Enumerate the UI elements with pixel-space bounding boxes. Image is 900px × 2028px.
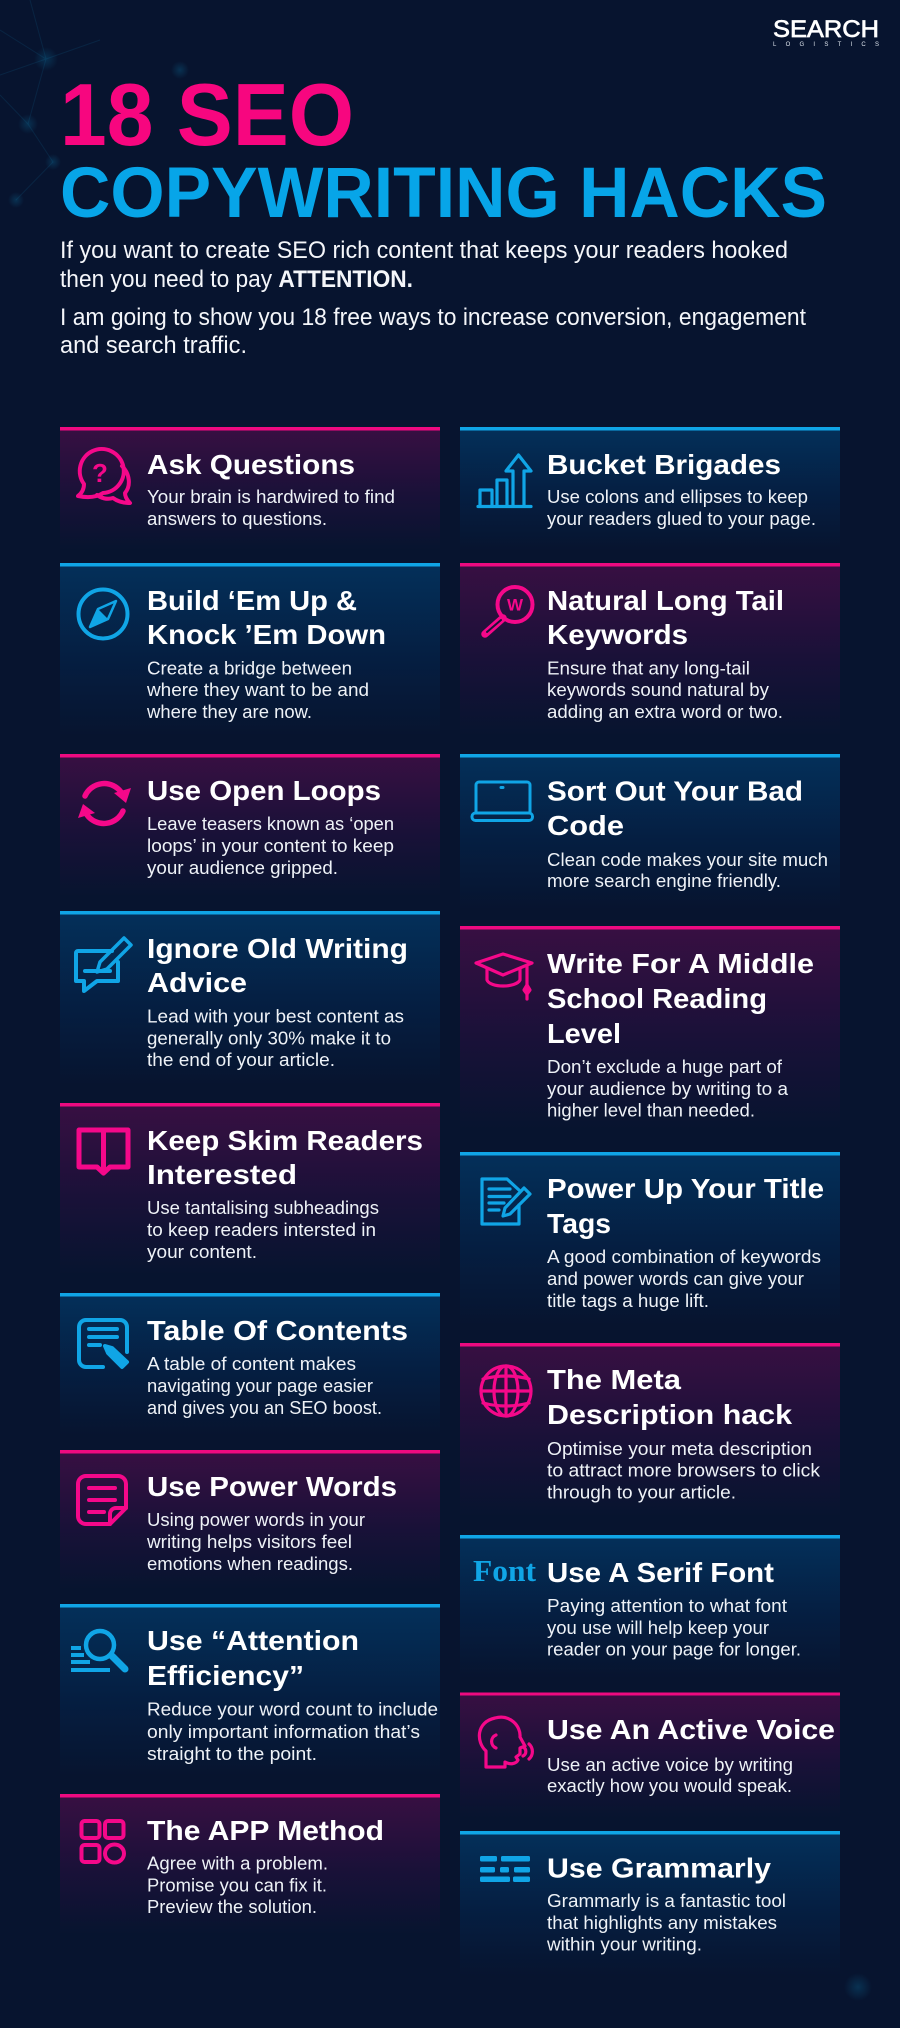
description: within your writing.	[546, 1934, 702, 1954]
panel: use an active voice	[460, 1692, 840, 1832]
description: writing helps visitors feel	[146, 1531, 352, 1552]
logo: SEARCH	[773, 16, 879, 43]
intro text: If you want to create SEO rich content that keeps your readers hooked	[60, 237, 788, 264]
intro text: and search traffic.	[60, 332, 247, 359]
description: Ensure that any long-tail	[547, 658, 750, 678]
panel: power up your title tags	[460, 1152, 840, 1344]
icon: document with pen	[482, 1179, 530, 1224]
panel: use power words	[60, 1450, 440, 1605]
description: the end of your article.	[147, 1049, 335, 1070]
description	[546, 1890, 786, 1954]
icon: text bars	[480, 1856, 530, 1882]
description	[147, 1197, 379, 1262]
description: Create a bridge between	[147, 658, 352, 678]
description: and power words can give your	[547, 1268, 804, 1289]
heading: Bucket Brigades	[547, 449, 781, 480]
description	[547, 1595, 801, 1660]
icon: app grid	[82, 1821, 124, 1862]
icon: laptop	[472, 782, 532, 820]
description: your readers glued to your page.	[547, 508, 816, 529]
description: to attract more browsers to click	[547, 1460, 821, 1480]
icon: growth chart	[478, 455, 531, 506]
panel: natural long tail keywords	[460, 563, 840, 755]
heading: Efficiency”	[147, 1660, 304, 1691]
heading: Description hack	[547, 1399, 792, 1430]
description: exactly how you would speak.	[547, 1775, 792, 1796]
heading: Tags	[547, 1208, 611, 1239]
description	[547, 1246, 821, 1311]
icon: graduation cap	[476, 954, 532, 999]
description: title tags a huge lift.	[547, 1290, 709, 1311]
heading	[147, 1125, 423, 1190]
title: 18 SEO	[60, 65, 354, 164]
panel: meta description hack	[460, 1343, 840, 1536]
heading: Write For A Middle	[547, 948, 814, 979]
heading: Use Grammarly	[547, 1852, 771, 1884]
description: Reduce your word count to include	[147, 1698, 438, 1720]
title	[60, 65, 827, 233]
description	[547, 658, 783, 722]
description: Paying attention to what font	[547, 1595, 787, 1616]
icon: loop arrows	[78, 784, 131, 823]
title: COPYWRITING HACKS	[60, 154, 827, 233]
icon: magnifier with W	[485, 587, 532, 634]
description: your audience gripped.	[147, 857, 338, 878]
heading: Code	[547, 810, 624, 841]
description	[146, 658, 369, 722]
heading	[147, 933, 408, 998]
description: A table of content makes	[147, 1353, 356, 1374]
description: where they are now.	[146, 701, 312, 722]
intro text	[60, 237, 806, 359]
description: Use an active voice by writing	[547, 1754, 793, 1775]
heading: Use An Active Voice	[547, 1714, 835, 1745]
heading: Table Of Contents	[147, 1315, 408, 1346]
description: Promise you can fix it.	[147, 1874, 327, 1896]
icon: document with pencil	[79, 1320, 127, 1367]
description: where they want to be and	[146, 679, 369, 700]
description: keywords sound natural by	[547, 679, 770, 700]
description: Clean code makes your site much	[547, 849, 828, 870]
panel: bucket brigades	[460, 427, 840, 564]
description	[146, 1509, 365, 1574]
description	[147, 1353, 382, 1418]
heading: Interested	[147, 1159, 297, 1190]
heading	[547, 585, 784, 650]
panel: the app method	[60, 1794, 440, 1950]
icon: question bubbles: ?	[92, 458, 108, 488]
description	[147, 486, 395, 529]
heading: Knock ’Em Down	[147, 619, 386, 650]
description	[547, 849, 828, 891]
panel: ask questions	[60, 427, 440, 564]
heading: Level	[547, 1018, 621, 1049]
heading: Use Open Loops	[147, 775, 381, 806]
icon: magnifier with W: W	[507, 596, 524, 614]
description: straight to the point.	[147, 1743, 317, 1764]
description: only important information that’s	[147, 1721, 420, 1742]
heading: Keywords	[547, 619, 688, 650]
icon: pen and speech bubble	[76, 938, 131, 991]
description: Use colons and ellipses to keep	[547, 486, 808, 507]
logo: LOGISTICS	[773, 42, 879, 48]
heading: Ignore Old Writing	[147, 933, 408, 964]
panel: keep skim readers interested	[60, 1103, 440, 1294]
heading: Use “Attention	[147, 1625, 359, 1656]
description: and gives you an SEO boost.	[147, 1397, 382, 1418]
description	[147, 813, 394, 878]
heading	[547, 1173, 824, 1239]
icon: globe	[481, 1366, 531, 1416]
description: generally only 30% make it to	[147, 1028, 391, 1048]
icon: open book	[79, 1130, 128, 1173]
description: A good combination of keywords	[547, 1246, 821, 1267]
heading: Use A Serif Font	[547, 1557, 774, 1588]
panel: use grammarly	[460, 1831, 840, 1992]
icon: magnifier with lines	[71, 1631, 125, 1670]
heading: School Reading	[547, 983, 767, 1014]
panel: middle school reading level	[460, 926, 840, 1152]
description	[547, 1056, 789, 1120]
heading	[547, 776, 803, 841]
description: emotions when readings.	[147, 1553, 353, 1574]
heading: Sort Out Your Bad	[547, 776, 803, 806]
description: Agree with a problem.	[147, 1852, 328, 1874]
panel: ignore old writing advice	[60, 911, 440, 1104]
intro text: I am going to show you 18 free ways to increase conversion, engagement	[60, 304, 806, 331]
description: Use tantalising subheadings	[147, 1197, 379, 1218]
heading: The APP Method	[147, 1815, 384, 1846]
icon: question bubbles	[78, 449, 130, 503]
description: Lead with your best content as	[147, 1006, 404, 1026]
description	[147, 1006, 404, 1070]
description: your content.	[147, 1241, 257, 1262]
heading: Build ‘Em Up &	[147, 585, 357, 616]
heading: Use Power Words	[147, 1471, 397, 1502]
heading: Keep Skim Readers	[147, 1125, 423, 1156]
description: that highlights any mistakes	[547, 1912, 777, 1933]
panel: use a serif font	[460, 1535, 840, 1694]
description: more search engine friendly.	[547, 870, 781, 891]
icon: note	[78, 1476, 126, 1524]
description	[147, 1698, 438, 1764]
heading: Power Up Your Title	[547, 1173, 824, 1204]
icon: speaking head	[479, 1717, 532, 1767]
description: higher level than needed.	[547, 1100, 755, 1120]
panel: attention efficiency	[60, 1604, 440, 1795]
description: loops’ in your content to keep	[147, 835, 394, 856]
description: Preview the solution.	[147, 1896, 317, 1917]
heading	[147, 585, 386, 650]
heading: Natural Long Tail	[547, 585, 784, 616]
panel: sort out your bad code	[460, 754, 840, 927]
icon: compass	[78, 590, 128, 638]
panel: table of contents	[60, 1293, 440, 1451]
icon: font sample: Font	[473, 1553, 537, 1588]
description: Don’t exclude a huge part of	[547, 1056, 783, 1077]
description: reader on your page for longer.	[547, 1638, 801, 1660]
description: Optimise your meta description	[547, 1438, 812, 1459]
intro text: then you need to pay ATTENTION.	[60, 266, 413, 293]
description: adding an extra word or two.	[547, 701, 783, 722]
description: your audience by writing to a	[547, 1078, 789, 1099]
description: Leave teasers known as ‘open	[147, 813, 394, 834]
description: navigating your page easier	[147, 1375, 373, 1396]
description	[547, 1438, 821, 1502]
description: you use will help keep your	[547, 1617, 769, 1638]
panel: open loops	[60, 754, 440, 912]
panel: build em up	[60, 563, 440, 755]
description: Grammarly is a fantastic tool	[547, 1890, 786, 1911]
description: Using power words in your	[147, 1509, 365, 1530]
heading: Advice	[147, 967, 247, 998]
heading: Ask Questions	[147, 449, 355, 480]
heading: The Meta	[547, 1364, 681, 1395]
heading	[147, 1625, 359, 1691]
heading	[547, 1364, 792, 1430]
heading	[547, 948, 814, 1049]
description	[547, 486, 816, 529]
description: Your brain is hardwired to find	[147, 486, 395, 507]
description	[147, 1852, 328, 1917]
description	[547, 1754, 793, 1796]
description: to keep readers intersted in	[147, 1219, 376, 1240]
description: through to your article.	[547, 1482, 736, 1502]
description: answers to questions.	[147, 508, 327, 529]
